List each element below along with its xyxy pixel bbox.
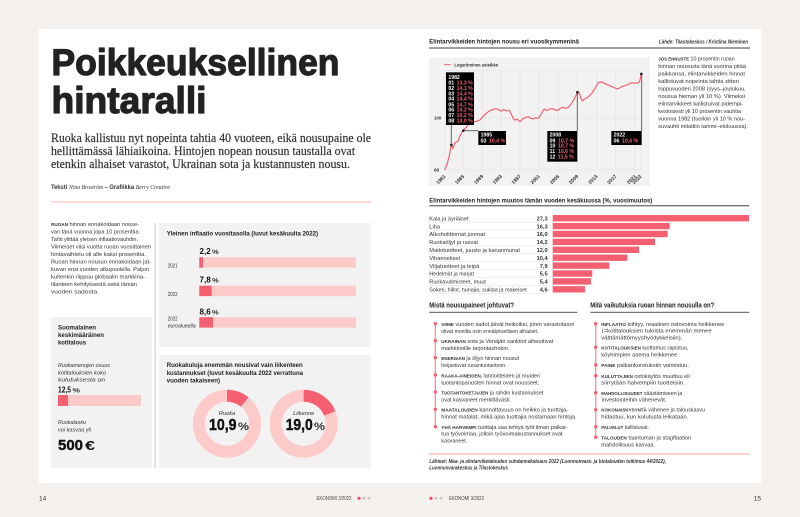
callout: 1982: 08 — [448, 118, 454, 124]
callout: 2008: 2008 — [550, 132, 561, 138]
bar: 2022: 7,8 — [200, 276, 211, 285]
bar: soft drinks: 16,0 — [537, 232, 548, 238]
food bill text — [58, 420, 92, 434]
callout: 1982: 13,0 % — [457, 118, 473, 124]
bar: meat: Liha — [429, 224, 441, 230]
footer left: EKONOMI 3/2022 — [316, 496, 352, 502]
callout: 2008: 11 — [550, 149, 555, 155]
household heading: keskimääräinen — [58, 332, 104, 339]
bar: soft drinks: Alkoholittomat juomat — [429, 232, 485, 238]
intro paragraph — [51, 222, 151, 296]
intro paragraph: Tahti ylittää yleisen inflaatiovauhdin. — [51, 237, 138, 243]
callout: 1982: 14,2 % — [457, 108, 473, 114]
line chart — [429, 57, 650, 186]
callout: 1982: 01 — [448, 81, 454, 87]
effects timeline — [594, 322, 597, 439]
x axis labels: 2009 — [568, 174, 580, 186]
effects list: investointeihin vähenevät. — [602, 398, 667, 404]
bar: vegetables: Vihannekset — [429, 256, 460, 262]
food share text — [58, 363, 110, 384]
donut heading: Ruokakuluja enemmän nousivat vain liikenteen — [167, 362, 303, 369]
causes list: heijastuvat ruoantuotantoon. — [441, 363, 507, 369]
food share text: Ruokamenojen osuus — [58, 363, 110, 369]
forecast text — [658, 57, 748, 130]
bar: dairy: Maitotuotteet, juusto ja kananmunat — [429, 248, 520, 254]
sources — [429, 453, 749, 472]
title — [52, 41, 340, 121]
bar: fish: Kala ja äyriäiset — [429, 216, 469, 222]
causes list: MAATALOUDEN kannattavuus on heikko ja tuottaja- — [441, 408, 568, 414]
effects list: PAINE palkankorotuksiin voimistuu. — [601, 363, 689, 369]
forecast text: kallistuvat nopeinta tahtia sitten — [658, 79, 739, 85]
forecast text: paikkansa, elintarvikkeiden hinnat — [658, 72, 745, 78]
effects list: PALVELUT kallistuvat. — [601, 425, 649, 431]
callout: 1982 — [446, 72, 474, 146]
callout: 1985 — [462, 129, 506, 145]
callout: 2008: 10,6 % — [558, 149, 574, 155]
causes list: ENERGIAN ja öljyn hinnan nousut — [441, 356, 519, 362]
forecast text: vuonna 1982 (tuolloin yli 10 % nou- — [658, 116, 745, 122]
intro text — [51, 131, 371, 171]
intro text: etenkin alhaiset varastot, Ukrainan sota ja kustannusten nousu. — [51, 157, 350, 171]
intro paragraph: kuvan ensi vuoden alkupuolella. Paljon — [51, 267, 149, 273]
callout: 2022: 2022 — [614, 132, 625, 138]
effects list: KOKONAISKYSYNTÄ vähenee ja talouskasvu — [601, 407, 705, 414]
food share text: kulutuksesta on — [58, 378, 105, 384]
bar: prepared food — [429, 278, 591, 286]
x axis labels — [435, 174, 644, 186]
forecast text: kestoisesti yli 10 prosentin vauhtia — [658, 109, 742, 115]
bar: fruit — [429, 270, 592, 278]
sources: Lähteet: Maa- ja elintarviketalouden suhdannekatsaus 2022 (Luonnonvara- ja biotalouden tutkimus 44/2022), — [429, 459, 666, 465]
callout: 1982: 14,7 % — [457, 102, 473, 108]
footer right: 15 — [754, 496, 761, 502]
panel: inflation — [159, 223, 371, 347]
causes timeline — [434, 322, 437, 428]
intro paragraph: kuitenkin riippuu globaalin markkina- — [51, 274, 145, 280]
household heading: kotitalous — [58, 340, 86, 346]
bar: cereals: Viljatuotteet ja leipä — [429, 264, 480, 270]
intro paragraph: vuoden sadosta. — [51, 290, 99, 296]
bar: 2022 euro area: 2022 — [168, 317, 178, 323]
food bill value — [58, 437, 95, 454]
forecast text: suvauhti mitattiin tammi–elokuussa). — [658, 124, 748, 130]
causes list: markkinoille tarjontashokin. — [441, 346, 510, 352]
title: Poikkeuksellinen — [52, 41, 340, 83]
chart legend — [444, 62, 498, 68]
bar: cereals — [429, 262, 609, 270]
bar: 2022 euro area — [168, 308, 356, 330]
food share value: % — [72, 388, 80, 394]
effects list: köyhimpien asema heikkenee. — [601, 352, 679, 358]
footer right — [429, 496, 761, 502]
callout: 1982: 1982 — [448, 75, 460, 81]
causes heading: Mistä nousupaineet johtuvat? — [429, 300, 514, 309]
bar: 2021: 2,2 — [200, 247, 211, 256]
forecast text: loppuvuoden 2008 (syys–joulukuu, — [658, 86, 746, 92]
effects list: hidastuu, kun kulutusta leikataan. — [601, 414, 689, 420]
bar: prepared food: 5,4 — [540, 280, 549, 286]
callout: 1982: 06 — [448, 108, 454, 114]
callout: 1982: 04 — [448, 97, 454, 103]
donut heading: vuoden takaiseen) — [167, 378, 220, 385]
bar: fruit: 5,5 — [540, 272, 548, 278]
causes list: UKRAINAN sota ja Venäjän sanktiot aiheuttivat — [441, 339, 554, 345]
bar chart heading: Elintarvikkeiden hintojen muutos tämän vuoden kesäkuussa (%, vuosimuutos) — [429, 198, 652, 205]
bar: 2021: 2021 — [168, 264, 178, 270]
bar: cereals: 7,9 — [540, 264, 548, 270]
bar: meat — [429, 223, 670, 230]
food bill text: Ruokalasku — [58, 420, 87, 426]
effects heading: Mitä vaikutuksia ruoan hinnan nousulla on? — [590, 300, 715, 309]
effects list: INFLAATIO kiihtyy, reaalinen ostovoima heikkenee — [601, 322, 724, 328]
donut heading — [167, 362, 303, 385]
callout: 1982: 05 — [448, 102, 454, 108]
household heading: Suomalainen — [58, 324, 96, 332]
callout: 2008 — [547, 91, 579, 162]
food share text: kotitalouksien koko — [58, 370, 106, 376]
panel: food vs transport — [159, 355, 371, 468]
effects list: MAHDOLLISUUDET säästämiseen ja — [601, 391, 683, 397]
causes list: kasvaneet. — [441, 438, 468, 444]
bar: oils: 14,2 — [537, 240, 548, 246]
chart heading: Elintarvikkeiden hintojen nousu eri vuosikymmeninä — [429, 38, 579, 45]
x axis labels: 1993 — [492, 174, 504, 186]
donut: food — [199, 396, 255, 452]
bar: 2022 — [168, 276, 356, 298]
callout: 2008: 10,7 % — [558, 138, 574, 144]
bar: 2021 — [168, 247, 356, 270]
donut heading: kustannukset (luvut kesäkuulta 2022 verrattuna — [167, 370, 303, 377]
intro paragraph: tilanteen kehityksestä sekä tämän — [51, 282, 137, 288]
causes list: YHÄ HARVEMPI tuottaja saa tehtyä työt ilman palkat- — [441, 424, 568, 431]
callout: 1982: 14,4 % — [457, 91, 473, 97]
donut: food: % — [238, 421, 249, 433]
x axis labels: 2021 — [626, 174, 638, 186]
food share bar — [58, 395, 141, 406]
forecast text: nousua hieman yli 10 %). Viimeksi — [658, 94, 745, 100]
bar: 2022 euro area: euroalueella — [168, 324, 196, 330]
bar chart — [429, 215, 749, 294]
causes list: olivat monilta osin ennätyksellisen alhaiset. — [441, 329, 539, 335]
callout: 1985: 10,4 % — [489, 139, 505, 145]
effects list — [601, 322, 724, 448]
callout: 1982: 03 — [448, 91, 454, 97]
intro text: Ruoka kallistuu nyt nopeinta tahtia 40 vuoteen, eikä nousupaine ole — [51, 131, 371, 145]
bar: fruit: Hedelmät ja marjat — [429, 272, 474, 278]
y axis labels: 100 — [434, 116, 442, 122]
causes list: hinnat matalat, mikä ajaa tuottajia nostamaan hintoja. — [441, 415, 577, 421]
callout: 1982: 07 — [448, 113, 454, 119]
callout: 1985: 1985 — [481, 132, 492, 138]
donut: transport — [276, 396, 332, 452]
chart legend: Logaritminen asteikko — [454, 62, 498, 68]
callout: 2022: 10,4 % — [622, 139, 638, 145]
callout: 1985: 03 — [481, 139, 487, 145]
food share value — [58, 386, 80, 394]
bar: sugar: 4,6 — [540, 288, 548, 294]
callout: 2008: 12 — [550, 155, 556, 161]
intro paragraph: RUOAN hinnan ennakoidaan nouse- — [51, 222, 139, 228]
bar: 2022 euro area: % — [212, 310, 219, 317]
bar: oils — [429, 239, 655, 246]
price line — [445, 74, 641, 170]
effects list: välttämättömyyshyödykkeisiin). — [601, 336, 683, 342]
intro paragraph: hintavaihtelu oli alle kaksi prosenttia. — [51, 252, 146, 258]
callout: 1982: 02 — [448, 86, 454, 92]
causes list: tua työvoimaa, jolloin työvoimakustannukset ovat — [441, 432, 563, 438]
bar: 2021: % — [212, 249, 219, 256]
chart heading: Lähde: Tilastokeskus / Kristiina Nieminen — [659, 39, 749, 45]
title: hintaralli — [52, 79, 206, 121]
inflation heading: Yleinen inflaatio vuositasolla (luvut kesäkuulta 2022) — [167, 231, 318, 238]
chart heading — [429, 38, 750, 49]
bar: vegetables: 10,4 — [537, 256, 549, 262]
donut: transport: 19,0 — [286, 417, 313, 434]
effects list: TALOUDEN taantuman ja stagflaation — [601, 436, 691, 442]
food bill text: voi kasvaa yli — [58, 428, 92, 434]
bar: sugar — [429, 286, 585, 294]
causes list: VIIME vuoden sadot jäivät heikoiksi, joten varastotasot — [441, 322, 574, 328]
donut: food: Ruoka — [219, 411, 235, 417]
panel: household — [51, 317, 152, 468]
byline: Teksti Nina Broström – Grafiikka Berry Creative — [51, 185, 170, 191]
bar: vegetables — [429, 254, 627, 262]
bar: 2022 euro area: 8,6 — [200, 308, 211, 317]
bar: soft drinks — [429, 231, 668, 238]
x axis labels: 2001 — [530, 174, 542, 186]
effects list: mahdollisuus kasvaa. — [601, 442, 655, 448]
food bill value: 500 — [58, 437, 83, 454]
donut: food: 10,9 — [209, 417, 237, 434]
causes list: tuotantopanosten hinnat ovat nousseet. — [441, 380, 540, 386]
footer left — [39, 496, 370, 502]
causes list: ovat kasvaneet merkittävästi. — [441, 397, 511, 403]
intro text: hellittämässä lähiaikoina. Hintojen nopean nousun taustalla ovat — [51, 144, 355, 158]
callout: 2008: 10 — [550, 144, 556, 150]
bar: meat: 16,3 — [537, 224, 548, 230]
causes list: RAAKA-AINEIDEN, lannoitteiden ja muiden — [441, 373, 540, 379]
bar: dairy — [429, 247, 639, 254]
intro paragraph: Ruoan hinnan nousun ennakoidaan jat- — [51, 260, 151, 266]
effects list: siirrytään halvempiin tuotteisiin. — [601, 380, 685, 386]
forecast text: JOS ENNUSTE 10 prosentin ruoan — [658, 57, 735, 63]
household heading — [58, 324, 104, 346]
bar: fish — [429, 215, 749, 222]
x axis labels: 2017 — [606, 174, 619, 186]
donut: transport: % — [314, 421, 325, 433]
callout: 1982: 14,4 % — [457, 97, 473, 103]
causes list: TUOTANTOKETJUJEN ja rahdin kustannukset — [441, 390, 544, 396]
causes list — [441, 322, 577, 444]
forecast text: elintarvikkeet kallistuivat pidempi- — [658, 101, 743, 107]
effects list: KOTITALOUKSIEN luottamus rapistuu, — [601, 346, 689, 352]
x axis labels: 1997 — [511, 174, 523, 186]
footer right: EKONOMI 3/2022 — [449, 496, 484, 502]
callout: 1982: 16,2 % — [457, 113, 473, 119]
callout: 1982: 13,3 % — [457, 81, 473, 87]
callout: 2022: 06 — [614, 139, 620, 145]
food bill value: € — [85, 438, 95, 453]
intro paragraph: Viimeiset viisi vuotta ruoan vuosittainen — [51, 244, 151, 250]
effects list: KULUTTAJIEN ostokäytös muuttuu eli — [601, 374, 690, 380]
x axis labels: 2022 — [631, 174, 644, 186]
food share value: 12,5 — [58, 386, 71, 394]
x axis labels: 1981 — [435, 174, 448, 186]
donut: transport: Liikenne — [293, 411, 314, 417]
callout: 2008: 09 — [550, 138, 556, 144]
y axis labels — [434, 116, 442, 174]
bar: 2022: % — [212, 278, 219, 285]
bar: dairy: 12,0 — [537, 248, 548, 254]
callout: 2008: 10,7 % — [558, 144, 574, 150]
x axis labels: 1989 — [473, 174, 485, 186]
intro paragraph: van tänä vuonna jopa 10 prosenttia. — [51, 230, 140, 236]
forecast text: hinnan noususta tänä vuonna pitää — [658, 64, 747, 70]
effects list: (=kotitalouksien tuloista enemmän menee — [602, 328, 712, 334]
column: causes — [429, 300, 577, 444]
x axis labels: 2013 — [587, 174, 600, 186]
bar: prepared food: Ruokavalmisteet, muut — [429, 280, 486, 286]
y axis labels: 60 — [434, 168, 440, 174]
x axis labels: 1985 — [454, 174, 466, 186]
column: effects — [590, 300, 749, 448]
bar: oils: Ruokaöljyt ja rasvat — [429, 240, 478, 246]
footer left: 14 — [39, 496, 47, 502]
sources: Luonnonvarakeskus ja Tilastokeskus — [429, 466, 508, 472]
x axis labels: 2005 — [549, 174, 561, 186]
bar: sugar: Sokeri, hillot, hunajia, suklaa ja makeiset — [429, 288, 527, 294]
callout: 2022 — [611, 73, 643, 145]
callout: 2008: 11,5 % — [558, 155, 574, 161]
bar: fish: 27,3 — [537, 216, 548, 222]
callout: 1982: 14,1 % — [457, 86, 473, 92]
bar: 2022: 2022 — [168, 292, 178, 298]
